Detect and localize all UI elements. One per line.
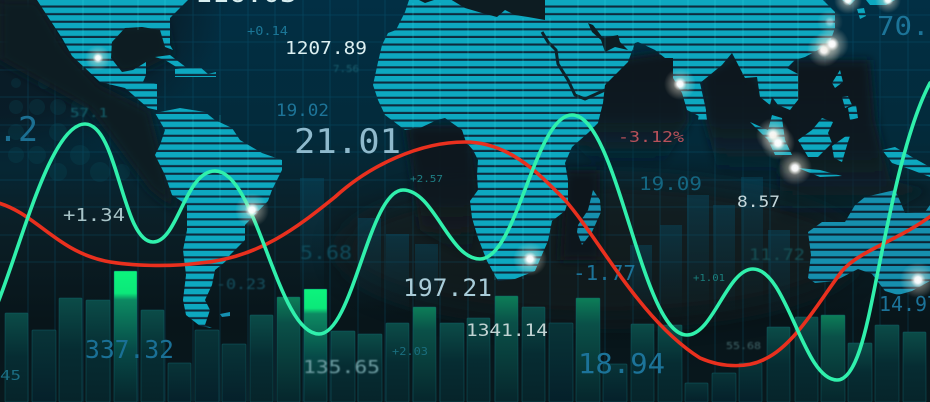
market numbers: 1207.89 bbox=[285, 38, 367, 59]
market numbers: +1.01 bbox=[693, 273, 725, 284]
Red Sea and Gulf of Aden bbox=[542, 32, 605, 99]
market numbers: 19.09 bbox=[639, 173, 702, 195]
land: New Guinea bbox=[882, 147, 930, 177]
market numbers: 7.56 bbox=[333, 64, 359, 75]
market numbers: -1.77 bbox=[573, 261, 636, 285]
market numbers: 18.94 bbox=[578, 347, 665, 380]
world map bbox=[37, 0, 930, 328]
red line chart bbox=[0, 142, 930, 366]
market numbers: 21.01 bbox=[294, 122, 401, 162]
market numbers: +2.03 bbox=[392, 345, 428, 358]
market numbers: +1.34 bbox=[63, 205, 125, 226]
market numbers: 19.02 bbox=[276, 101, 329, 121]
market numbers: 11.72 bbox=[749, 245, 805, 264]
market numbers: 135.65 bbox=[303, 357, 380, 378]
market numbers: +2.57 bbox=[410, 174, 443, 185]
market numbers: +0.14 bbox=[247, 24, 288, 38]
market numbers: 5.68 bbox=[300, 242, 352, 264]
land: North America bbox=[37, 0, 188, 110]
market numbers: -3.12% bbox=[618, 128, 684, 146]
land: Sri Lanka bbox=[698, 105, 707, 120]
market numbers: 45 bbox=[0, 369, 21, 384]
Persian Gulf bbox=[588, 23, 628, 52]
green line chart bbox=[0, 83, 930, 380]
market numbers: 337.32 bbox=[85, 335, 174, 364]
bright grid on land bbox=[83, 0, 798, 280]
faint blue background bars bbox=[300, 177, 790, 320]
land: Southeast Asia islands bbox=[750, 0, 895, 177]
land: Caribbean islands bbox=[155, 55, 216, 77]
market numbers: 197.21 bbox=[403, 274, 492, 302]
land: Africa and Eurasia bbox=[373, 0, 835, 281]
market numbers: 1341.14 bbox=[466, 321, 548, 341]
background dots bbox=[8, 76, 130, 182]
land: Australia bbox=[808, 190, 930, 295]
land: South America bbox=[155, 108, 282, 328]
Mediterranean sea bbox=[417, 0, 545, 20]
green market bars bbox=[5, 271, 926, 402]
market numbers: 55.68 bbox=[726, 341, 761, 352]
market numbers: 8.57 bbox=[737, 192, 780, 211]
dark seas beside the continents bbox=[0, 0, 930, 260]
glowing city lights bbox=[85, 0, 930, 298]
land: Madagascar bbox=[577, 190, 601, 245]
market numbers: -0.23 bbox=[216, 277, 266, 293]
market numbers: 57.1 bbox=[70, 106, 108, 120]
land: Falklands bbox=[220, 312, 230, 317]
